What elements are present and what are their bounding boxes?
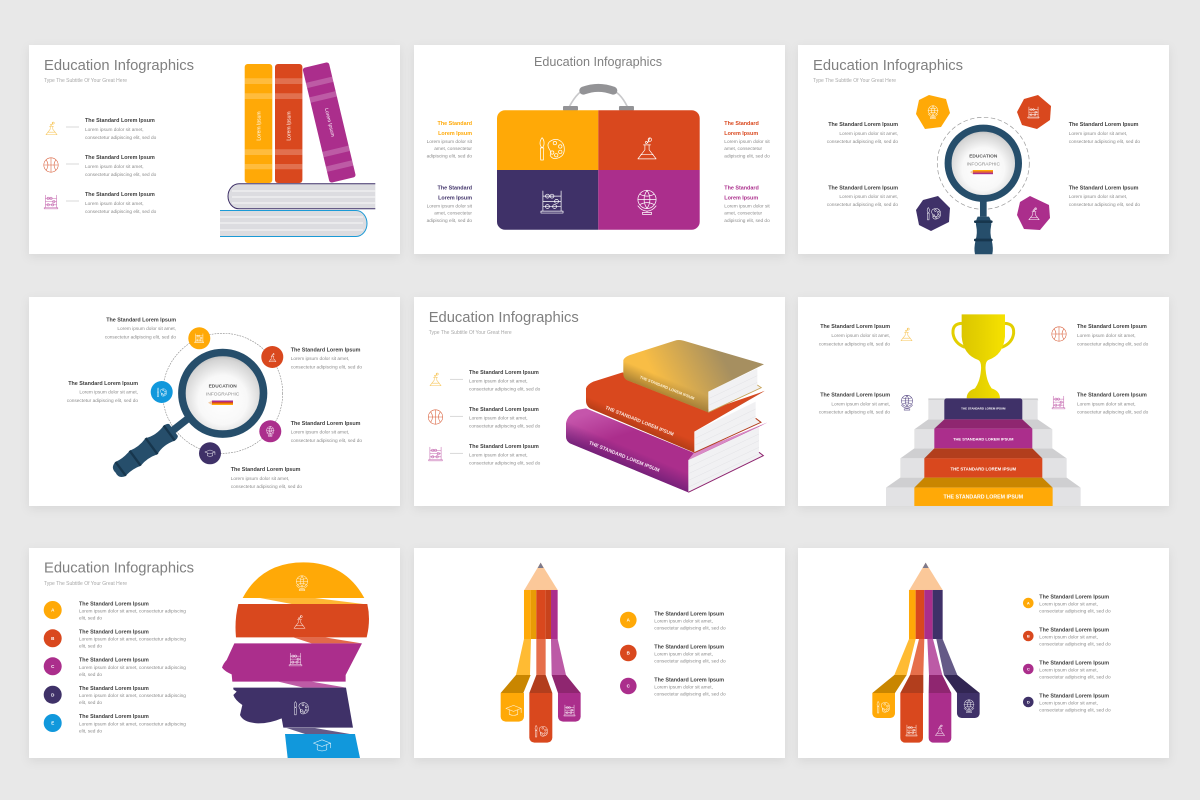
- text block: bottom left: consectetur adipiscing elit, sed do: [827, 202, 898, 208]
- text block C: [1039, 660, 1111, 680]
- icon: flask: [935, 725, 945, 735]
- icon: palette: [294, 702, 309, 715]
- text block A: consectetur adipiscing elit, sed do: [1039, 608, 1111, 614]
- icon: abacus: [44, 195, 58, 209]
- text block: orange: [724, 121, 770, 160]
- title: Education Infographics: [813, 58, 963, 74]
- icon: abacus: [289, 653, 302, 666]
- title: Education Infographics: [534, 55, 662, 69]
- text block: right upper: consectetur adipiscing elit, sed do: [291, 364, 362, 370]
- text block: right lower: consectetur adipiscing elit, sed do: [291, 438, 362, 444]
- badge A: [44, 601, 62, 619]
- text block C: The Standard Lorem Ipsum: [1039, 660, 1109, 666]
- text block: navy: The Standard: [438, 186, 472, 192]
- title: Education Infographics: [44, 58, 194, 74]
- title: Education Infographics: [44, 560, 194, 576]
- icon: graduation cap: [506, 705, 521, 715]
- text block C: [79, 658, 186, 678]
- text block D: The Standard Lorem Ipsum: [1039, 694, 1109, 700]
- icon: globe: [964, 700, 974, 713]
- text block: magenta: Lorem ipsum dolor sit: [724, 204, 770, 210]
- badge B: [620, 645, 637, 661]
- subtitle: Type The Subtitle Of Your Great Here: [429, 330, 512, 336]
- text block: bottom right: The Standard Lorem Ipsum: [1069, 186, 1139, 192]
- icon: flask: [294, 615, 305, 628]
- icon: flask: [46, 122, 57, 135]
- text block: bottom right: Lorem ipsum dolor sit amet,: [1069, 194, 1127, 200]
- slice: yellow crown: [243, 562, 364, 604]
- pencil graphic: [872, 563, 980, 743]
- text block: right upper: [291, 348, 362, 370]
- magnifier handle: [109, 418, 188, 481]
- bag quadrant: orange: [598, 110, 700, 170]
- text block A: The Standard Lorem Ipsum: [654, 612, 724, 618]
- icon: flask: [638, 138, 656, 159]
- badge C: C: [1027, 666, 1030, 672]
- text block 2: [469, 407, 541, 430]
- subtitle: Type The Subtitle Of Your Great Here: [813, 78, 896, 84]
- text block: yellow: The Standard: [438, 121, 472, 127]
- text block D: [79, 686, 186, 706]
- text block A: [654, 612, 726, 631]
- hexagon: yellow: [916, 95, 950, 129]
- slice: orange: [236, 604, 369, 643]
- magnifier lens: [182, 352, 264, 434]
- text block: navy: adipiscing elit, sed do: [427, 218, 472, 224]
- text block C: Lorem ipsum dolor sit amet, consectetur adipiscing: [79, 665, 186, 671]
- text block 1: [469, 370, 541, 393]
- text block: magenta: amet, consectetur: [724, 210, 762, 216]
- text block A: consectetur adipiscing elit, sed do: [654, 625, 726, 631]
- badge C: C: [51, 664, 55, 669]
- text block: bottom left: Lorem ipsum dolor sit amet,: [839, 194, 898, 200]
- bag handle: [563, 88, 634, 111]
- text block 2: consectetur adipiscing elit, sed do: [85, 172, 157, 178]
- text block: orange: Lorem Ipsum: [724, 131, 758, 137]
- text block: bottom right: [1077, 393, 1149, 416]
- text block: top left: The Standard Lorem Ipsum: [828, 122, 898, 128]
- text block: left: [67, 381, 138, 404]
- stairs with carpet: THE STANDARD LOREM IPSUM: [961, 407, 1006, 411]
- panel: pencil with four legs: [798, 548, 1169, 758]
- text block: bottom left: consectetur adipiscing elit, sed do: [819, 410, 890, 416]
- text block A: The Standard Lorem Ipsum: [1039, 594, 1109, 600]
- text block B: [79, 630, 186, 650]
- dashed ring: [163, 333, 283, 453]
- book: navy flat: [228, 184, 375, 209]
- badge A: [620, 612, 637, 628]
- panel: school bag: [414, 45, 785, 254]
- magnifier lens: EDUCATION: [209, 384, 237, 390]
- icon: abacus: [1052, 396, 1065, 409]
- text block 1: Lorem ipsum dolor sit amet,: [469, 378, 528, 384]
- badge C: [44, 657, 62, 675]
- subtitle: Type The Subtitle Of Your Great Here: [44, 78, 127, 84]
- text block C: elit, sed do: [79, 672, 102, 678]
- book: magenta leaning: Lorem Ipsum: [323, 108, 336, 137]
- text block: bottom: The Standard Lorem Ipsum: [231, 467, 301, 473]
- text block 1: consectetur adipiscing elit, sed do: [469, 387, 541, 393]
- magnifier lens: INFOGRAPHIC: [967, 162, 1000, 168]
- text block C: The Standard Lorem Ipsum: [79, 658, 149, 664]
- text block 3: The Standard Lorem Ipsum: [85, 192, 155, 198]
- book: orange upright: Lorem Ipsum: [286, 111, 292, 141]
- panel: pencil with three legs: [414, 548, 785, 758]
- magnifier handle: [974, 200, 993, 254]
- node: blue: [151, 381, 173, 403]
- panel: books on shelf: [29, 45, 400, 254]
- text block: orange: Lorem ipsum dolor sit: [724, 139, 770, 145]
- text block: navy: Lorem ipsum dolor sit: [427, 204, 473, 210]
- icon: abacus: [541, 191, 563, 213]
- text block: top: The Standard Lorem Ipsum: [106, 318, 176, 324]
- text block: top right: Lorem ipsum dolor sit amet,: [1077, 333, 1136, 339]
- badge E: E: [51, 721, 54, 726]
- text block C: [654, 678, 726, 697]
- pencil graphic: [501, 563, 581, 743]
- badge D: [1023, 697, 1034, 707]
- node: yellow: [188, 327, 210, 349]
- text block B: Lorem ipsum dolor sit amet,: [1039, 635, 1098, 641]
- text block D: Lorem ipsum dolor sit amet,: [1039, 701, 1098, 707]
- icon: palette: [540, 138, 564, 160]
- text block: navy: [427, 186, 473, 224]
- text block C: consectetur adipiscing elit, sed do: [1039, 674, 1111, 680]
- badge B: B: [627, 651, 631, 656]
- badge E: [44, 714, 62, 732]
- text block D: [1039, 694, 1111, 713]
- text block: yellow: [427, 121, 473, 160]
- icon: globe: [901, 395, 913, 410]
- book: orange middle: THE STANDARD LOREM IPSUM: [604, 405, 674, 438]
- book: yellow upright: [245, 64, 272, 183]
- text block 2: Lorem ipsum dolor sit amet,: [85, 164, 144, 170]
- text block: top left: Lorem ipsum dolor sit amet,: [831, 333, 890, 339]
- text block: bottom left: The Standard Lorem Ipsum: [820, 393, 890, 399]
- text block: bottom left: [827, 186, 898, 208]
- text block: top right: The Standard Lorem Ipsum: [1069, 122, 1139, 128]
- text block: orange: amet, consectetur: [724, 146, 762, 152]
- text block: magenta: adipiscing elit, sed do: [724, 218, 770, 224]
- badge B: B: [1027, 634, 1030, 638]
- text block: magenta: [724, 186, 770, 224]
- text block: yellow: amet, consectetur: [434, 146, 472, 152]
- slice: blue: [285, 734, 360, 758]
- text block: bottom left: [819, 393, 890, 416]
- text block C: The Standard Lorem Ipsum: [654, 678, 724, 684]
- magnifier lens: INFOGRAPHIC: [206, 392, 240, 398]
- text block B: The Standard Lorem Ipsum: [79, 630, 149, 636]
- icon: flask: [901, 328, 912, 341]
- text block: top left: [819, 324, 890, 347]
- text block 2: The Standard Lorem Ipsum: [85, 155, 155, 161]
- text block 3: [85, 192, 157, 215]
- text block E: elit, sed do: [79, 728, 102, 734]
- badge D: [44, 686, 62, 704]
- slice: magenta: [222, 643, 362, 688]
- text block: top: consectetur adipiscing elit, sed do: [105, 334, 176, 340]
- text block 1: consectetur adipiscing elit, sed do: [85, 135, 157, 141]
- node: navy: [199, 442, 221, 464]
- text block 3: consectetur adipiscing elit, sed do: [469, 461, 541, 467]
- text block: top right: Lorem ipsum dolor sit amet,: [1069, 131, 1127, 137]
- text block B: [1039, 628, 1111, 647]
- panel: tilted magnifier with nodes: [29, 297, 400, 506]
- text block: orange: The Standard: [724, 121, 759, 127]
- icon: abacus: [429, 447, 442, 461]
- text block A: Lorem ipsum dolor sit amet,: [654, 618, 713, 624]
- text block: bottom: [231, 467, 302, 490]
- text block E: The Standard Lorem Ipsum: [79, 714, 149, 720]
- badge B: [1023, 631, 1034, 641]
- icon: palette: [927, 208, 941, 220]
- badge A: A: [51, 608, 55, 613]
- text block: top right: [1077, 324, 1149, 347]
- subtitle: Type The Subtitle Of Your Great Here: [44, 581, 127, 587]
- text block: right lower: [291, 421, 362, 444]
- book: gold top: THE STANDARD LOREM IPSUM: [639, 375, 695, 401]
- icon: palette: [535, 725, 548, 737]
- hexagon: navy: [916, 196, 950, 231]
- stairs with carpet: [886, 398, 1081, 506]
- bag quadrant: navy: [497, 170, 598, 230]
- stairs with carpet: THE STANDARD LOREM IPSUM: [944, 494, 1024, 500]
- text block B: Lorem ipsum dolor sit amet,: [654, 652, 713, 658]
- icon: abacus: [906, 725, 917, 736]
- hexagon: orange: [1017, 95, 1051, 129]
- text block C: consectetur adipiscing elit, sed do: [654, 691, 726, 697]
- text block: navy: amet, consectetur: [434, 210, 472, 216]
- text block B: The Standard Lorem Ipsum: [654, 644, 724, 650]
- text block: bottom right: The Standard Lorem Ipsum: [1077, 393, 1147, 399]
- badge C: [620, 678, 637, 694]
- text block: navy: Lorem Ipsum: [438, 196, 472, 202]
- stairs with carpet: THE STANDARD LOREM IPSUM: [953, 437, 1014, 442]
- dashed ring: [937, 117, 1029, 209]
- text block 3: Lorem ipsum dolor sit amet,: [469, 452, 528, 458]
- hexagon: magenta: [1017, 196, 1050, 230]
- text block C: Lorem ipsum dolor sit amet,: [1039, 668, 1098, 674]
- badge D: D: [1027, 700, 1030, 704]
- text block: yellow: adipiscing elit, sed do: [427, 154, 472, 160]
- icon: basketball: [1052, 327, 1066, 341]
- badge C: C: [627, 684, 631, 689]
- magnifier lens: EDUCATION: [969, 154, 998, 160]
- icon: basketball: [428, 410, 443, 424]
- book: magenta bottom: [566, 408, 767, 492]
- text block 2: consectetur adipiscing elit, sed do: [469, 424, 541, 430]
- badge B: B: [51, 636, 55, 641]
- text block A: Lorem ipsum dolor sit amet,: [1039, 602, 1098, 608]
- text block 3: [469, 444, 541, 467]
- text block 2: The Standard Lorem Ipsum: [469, 407, 539, 413]
- bag quadrant: magenta: [598, 170, 700, 230]
- text block: top left: The Standard Lorem Ipsum: [820, 324, 890, 330]
- text block: top right: consectetur adipiscing elit, sed do: [1077, 341, 1149, 347]
- text block: magenta: The Standard: [724, 186, 759, 192]
- text block: top right: [1069, 122, 1140, 145]
- badge A: [1023, 598, 1034, 608]
- text block 2: Lorem ipsum dolor sit amet,: [469, 416, 528, 422]
- book: orange middle: [586, 372, 765, 453]
- node: orange: [261, 346, 283, 368]
- icon: flask: [430, 373, 441, 386]
- panel: magnifier with hexagons: [798, 45, 1169, 254]
- node: magenta: [259, 420, 281, 442]
- text block B: [654, 644, 726, 664]
- text block: top left: consectetur adipiscing elit, sed do: [827, 139, 898, 145]
- book: gold top: [623, 340, 764, 412]
- badge A: A: [627, 618, 631, 623]
- text block: bottom right: consectetur adipiscing elit, sed do: [1077, 410, 1149, 416]
- text block E: [79, 714, 186, 734]
- text block: orange: adipiscing elit, sed do: [724, 154, 770, 160]
- 3D book stack: [566, 340, 767, 492]
- text block: right upper: Lorem ipsum dolor sit amet,: [291, 356, 349, 362]
- text block C: Lorem ipsum dolor sit amet,: [654, 684, 713, 690]
- badge B: [44, 629, 62, 647]
- text block A: [79, 602, 186, 622]
- text block D: The Standard Lorem Ipsum: [79, 686, 149, 692]
- text block: top right: The Standard Lorem Ipsum: [1077, 324, 1147, 330]
- icon: globe: [296, 576, 308, 591]
- text block A: Lorem ipsum dolor sit amet, consectetur adipiscing: [79, 608, 186, 614]
- text block: top left: [827, 122, 898, 145]
- text block 1: The Standard Lorem Ipsum: [469, 370, 539, 376]
- slice: navy: [233, 688, 353, 734]
- text block: top left: Lorem ipsum dolor sit amet,: [839, 131, 898, 137]
- text block: yellow: Lorem ipsum dolor sit: [427, 139, 473, 145]
- text block 1: [85, 118, 157, 141]
- panel: trophy on stairs: [798, 297, 1169, 506]
- text block B: consectetur adipiscing elit, sed do: [654, 658, 726, 664]
- text block B: Lorem ipsum dolor sit amet, consectetur adipiscing: [79, 637, 186, 643]
- text block A: The Standard Lorem Ipsum: [79, 602, 149, 608]
- stairs with carpet: THE STANDARD LOREM IPSUM: [951, 467, 1016, 472]
- trophy: [953, 314, 1014, 398]
- icon: abacus: [564, 705, 575, 716]
- head slices: [222, 562, 369, 758]
- text block: right lower: Lorem ipsum dolor sit amet,: [291, 430, 349, 436]
- book: orange upright: [275, 64, 302, 183]
- icon: basketball: [44, 158, 58, 172]
- text block: top: Lorem ipsum dolor sit amet,: [117, 326, 176, 332]
- badge C: [1023, 664, 1034, 674]
- book: yellow upright: Lorem Ipsum: [256, 111, 262, 141]
- text block A: [1039, 594, 1111, 614]
- text block: yellow: Lorem Ipsum: [438, 131, 472, 137]
- badge A: A: [1027, 600, 1030, 606]
- text block: top right: consectetur adipiscing elit, sed do: [1069, 139, 1140, 145]
- text block: bottom: Lorem ipsum dolor sit amet,: [231, 476, 289, 482]
- text block 1: The Standard Lorem Ipsum: [85, 118, 155, 124]
- text block: bottom right: consectetur adipiscing elit, sed do: [1069, 202, 1140, 208]
- text block D: elit, sed do: [79, 700, 102, 706]
- text block: bottom right: [1069, 186, 1140, 208]
- text block: right upper: The Standard Lorem Ipsum: [291, 348, 361, 354]
- icon: palette: [877, 701, 890, 713]
- text block D: consectetur adipiscing elit, sed do: [1039, 707, 1111, 713]
- text block E: Lorem ipsum dolor sit amet, consectetur adipiscing: [79, 721, 186, 727]
- book: blue flat: [220, 210, 367, 236]
- text block 1: Lorem ipsum dolor sit amet,: [85, 127, 144, 133]
- text block 3: The Standard Lorem Ipsum: [469, 444, 539, 450]
- icon: globe: [638, 190, 656, 214]
- text block A: elit, sed do: [79, 616, 102, 622]
- panel: head profile: [29, 548, 400, 758]
- icon: globe: [928, 106, 938, 119]
- badge D: D: [51, 692, 55, 697]
- text block 2: [85, 155, 157, 178]
- text block: left: The Standard Lorem Ipsum: [68, 381, 138, 387]
- text block: top: [105, 318, 176, 340]
- text block: bottom left: Lorem ipsum dolor sit amet,: [831, 402, 890, 408]
- title: Education Infographics: [429, 310, 579, 326]
- text block: top left: consectetur adipiscing elit, sed do: [819, 341, 890, 347]
- icon: abacus: [1028, 107, 1039, 118]
- text block D: Lorem ipsum dolor sit amet, consectetur adipiscing: [79, 693, 186, 699]
- icon: graduation cap: [313, 740, 331, 751]
- text block: bottom left: The Standard Lorem Ipsum: [828, 186, 898, 192]
- text block B: The Standard Lorem Ipsum: [1039, 628, 1109, 634]
- text block 3: consectetur adipiscing elit, sed do: [85, 209, 157, 215]
- book: magenta bottom: THE STANDARD LOREM IPSUM: [588, 440, 660, 474]
- text block: left: Lorem ipsum dolor sit amet,: [79, 390, 138, 396]
- panel: stacked 3D books: [414, 297, 785, 506]
- icon: flask: [1029, 208, 1039, 220]
- magnifier lens: [948, 128, 1018, 198]
- text block: bottom: consectetur adipiscing elit, sed do: [231, 484, 302, 490]
- text block 3: Lorem ipsum dolor sit amet,: [85, 201, 144, 207]
- text block: right lower: The Standard Lorem Ipsum: [291, 421, 361, 427]
- bag quadrant: yellow: [497, 110, 598, 170]
- book: magenta leaning: [302, 62, 356, 183]
- text block B: consectetur adipiscing elit, sed do: [1039, 641, 1111, 647]
- text block B: elit, sed do: [79, 644, 102, 650]
- text block: left: consectetur adipiscing elit, sed do: [67, 398, 138, 404]
- text block: magenta: Lorem Ipsum: [724, 196, 758, 202]
- text block: bottom right: Lorem ipsum dolor sit amet,: [1077, 402, 1136, 408]
